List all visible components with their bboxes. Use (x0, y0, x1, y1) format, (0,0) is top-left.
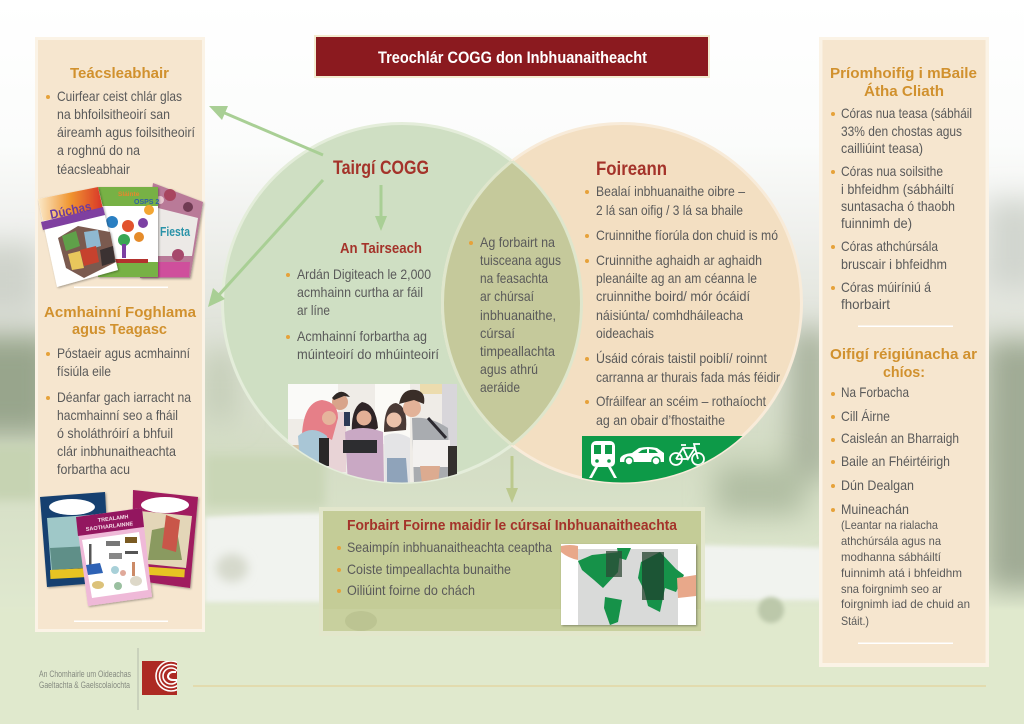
venn diagram (222, 124, 802, 482)
circle: Foireann (442, 124, 802, 482)
bullet: digital platform: ar líne (297, 302, 330, 318)
small girl (384, 403, 406, 432)
arrows: Tairgí COGG to left panel (208, 106, 323, 307)
overlap text: na feasachta (480, 270, 548, 286)
book: Sláinte agus Folláine (98, 187, 159, 277)
bullet: heating: Córas nua teasa (sábháil (841, 105, 972, 121)
arrow: to Acmhainní (208, 180, 323, 307)
bullet: composting: Córas múiríniú á (841, 279, 931, 295)
footer: organisation name (39, 669, 131, 691)
overlap edge (512, 160, 583, 446)
heading: regional offices: Oifigí réigiúnacha ar (830, 346, 977, 363)
bullet: lighting: fuinnimh de) (841, 215, 912, 231)
bullet: teacher resources (286, 328, 439, 362)
bullet: green cover question: na bhfoilsitheoirí san (57, 106, 170, 122)
icon: bicycle (670, 444, 704, 465)
overlap text: agus athrú (480, 361, 538, 377)
bullet: composting: fhorbairt (841, 296, 890, 312)
photo: world map puzzle (561, 544, 696, 625)
list: regional offices: Baile an Fhéirtéirigh (841, 453, 950, 469)
arrow: down to An Tairseach (375, 185, 387, 231)
overlap text: timpeallachta (480, 343, 555, 359)
bullet: public transport (585, 350, 780, 385)
bullet: sustainable suppliers (46, 389, 191, 477)
book: Fiesta (140, 183, 203, 278)
bullet: face to face meetings: Cruinnithe aghaidh ar aghaidh (596, 252, 762, 268)
bullet: posters: Póstaeir agus acmhainní (57, 345, 190, 361)
bullet: public transport: carranna ar thurais fada más féidir (596, 369, 780, 385)
list: regional offices: Caisleán an Bharraigh (841, 430, 959, 446)
note: state buildings: modhanna sábháiltí (841, 550, 942, 564)
bullet: sustainable suppliers: clár inbhunaitheachta (57, 443, 176, 459)
bullet: sustainable suppliers: ó sholáthróirí a bhfuil (57, 425, 173, 441)
overlap text: tuisceana agus (480, 252, 561, 268)
heading: Teácsleabhair: Teácsleabhair (70, 65, 169, 82)
image: textbook covers (38, 183, 203, 287)
logo (142, 661, 186, 695)
list: regional offices: Dún Dealgan (841, 477, 914, 493)
bullet: posters (46, 345, 190, 379)
footer: organisation name: Gaeltachta & Gaelscolaíochta (39, 680, 131, 691)
note: state buildings: sna foirgnimh seo ar (841, 582, 942, 596)
bullet: lighting: Córas nua soilsithe (841, 163, 943, 179)
bullet: green cover question: a roghnú do na (57, 142, 140, 158)
overlap segment (441, 160, 580, 446)
heading: Dublin head office (830, 65, 977, 100)
boy right (403, 399, 421, 417)
bullet: heating: 33% den chostas agus (841, 123, 962, 139)
panel: textbooks and learning resources (35, 37, 205, 632)
bullet: working arrangements: Bealaí inbhuanaithe oibre – (596, 183, 745, 199)
girl pink hair (302, 400, 338, 440)
bullet: cycle to work: Ofráilfear an scéim – rothaíocht (596, 393, 766, 409)
bullet: digital platform (286, 266, 431, 318)
overlap text: cúrsaí (480, 325, 515, 341)
book: Sláinte agus Folláine: OSPS 2 (134, 199, 159, 206)
boy at back (328, 412, 346, 472)
panel: staff development (319, 507, 705, 636)
bullet: heating: cailliúint teasa) (841, 140, 923, 156)
book: Sláinte agus Folláine: Sláinte (118, 191, 140, 198)
bullet: virtual meetings: Cruinnithe fíorúla don chuid is mó (596, 227, 778, 243)
book: Fiesta: Fiesta (160, 224, 191, 239)
note: state buildings: Stáit.) (841, 614, 869, 628)
bullet: cycle to work (585, 393, 766, 428)
list: regional offices: Muineachán (841, 501, 909, 517)
bullet: cycle to work: ag an obair d’fhostaithe (596, 412, 725, 428)
heading: Dublin head office: Príomhoifig i mBaile (830, 65, 977, 82)
image: posters: SAOTHARLAINNE (86, 521, 134, 533)
bullet: lighting: suntasacha ó thaobh (841, 198, 955, 214)
bullet: green cover question: téacsleabhair (57, 161, 130, 177)
overlap text (469, 234, 561, 395)
overlap text: Ag forbairt na (480, 234, 555, 250)
title banner: Treochlár COGG don Inbhuanaitheacht (378, 48, 647, 67)
bullet: public transport: Úsáid córais taistil poiblí/ roinnt (596, 350, 767, 366)
list: regional offices: Na Forbacha (841, 384, 909, 400)
bullet: lighting (831, 163, 955, 231)
bullet: green cover question (46, 88, 195, 177)
footer: organisation name: An Chomhairle um Oideachas (39, 669, 131, 680)
panel: offices (819, 37, 989, 667)
heading: Foireann: Foireann (596, 159, 667, 180)
heading: regional offices: chíos: (883, 364, 925, 381)
image: posters: TREALAMH (98, 514, 129, 524)
circle: Tairgí COGG (222, 124, 582, 482)
girl centre (352, 402, 378, 430)
bullet: teacher resources: múinteoirí do mhúinteoirí (297, 346, 439, 362)
bullet list: Seaimpín inbhuanaitheachta ceaptha (347, 539, 552, 555)
bullet list (337, 539, 552, 598)
note: state buildings: fuinnimh atá i bhfeidhm (841, 566, 962, 580)
bullet: teacher resources: Acmhainní forbartha ag (297, 328, 427, 344)
bullet: recycling (831, 238, 947, 272)
bullet: face to face meetings: pleanáilte ag an am céanna le (596, 270, 757, 286)
note: state buildings: foirgnimh iad de chuid an (841, 597, 970, 611)
overlap text: inbhuanaithe, (480, 307, 556, 323)
title banner (314, 35, 710, 78)
bullet: recycling: bruscair i bhfeidhm (841, 256, 947, 272)
bullet: posters: físiúla eile (57, 363, 111, 379)
green transport strip (582, 436, 742, 482)
bullet: face to face meetings (585, 252, 762, 341)
overlap text: ar chúrsaí (480, 288, 534, 304)
book: Dúchas (38, 187, 118, 287)
bullet: working arrangements: 2 lá san oifig / 3 lá sa bhaile (596, 202, 743, 218)
note: state buildings (841, 518, 970, 628)
icon: car (620, 447, 664, 465)
photo: students with tablet (288, 384, 457, 485)
bullet: green cover question: áireamh agus foilsitheoirí (57, 124, 195, 140)
arrow: down to staff development (506, 456, 518, 503)
left circle content (286, 158, 457, 485)
note: state buildings: athchúrsála agus na (841, 534, 941, 548)
list: regional offices: Cill Áirne (841, 408, 890, 424)
bullet: green cover question: Cuirfear ceist chlár glas (57, 88, 182, 104)
heading: Tairgí COGG: Tairgí COGG (333, 158, 429, 179)
heading: Acmhainní Foghlama agus Teagasc (44, 304, 197, 338)
heading: An Tairseach: An Tairseach (340, 240, 422, 257)
right circle content (582, 159, 780, 486)
heading: staff development: Forbairt Foirne maidir le cúrsaí Inbhuanaitheachta (347, 518, 678, 534)
list: regional offices (831, 384, 959, 517)
bullet: face to face meetings: cruinnithe boird/ mór ócáidí (596, 288, 750, 304)
bullet: working arrangements (585, 183, 745, 218)
book: Dúchas: Dúchas (49, 199, 93, 222)
bullet: lighting: i bhfeidhm (sábháiltí (841, 181, 954, 197)
bullet: sustainable suppliers: Déanfar gach iarracht na (57, 389, 191, 405)
bullet: sustainable suppliers: forbartha acu (57, 461, 130, 477)
bullet: digital platform: Ardán Digiteach le 2,000 (297, 266, 431, 282)
image: posters (40, 490, 198, 606)
river (205, 513, 825, 602)
bullet: face to face meetings: oideachais (596, 325, 654, 341)
heading: Acmhainní Foghlama agus Teagasc: agus Teagasc (72, 321, 167, 338)
arrow: to Teácsleabhair (209, 106, 323, 155)
bullet: face to face meetings: náisiúnta/ comhdháileacha (596, 307, 743, 323)
note: state buildings: (Leantar na rialacha (841, 518, 938, 532)
heading: Acmhainní Foghlama agus Teagasc: Acmhainní Foghlama (44, 304, 197, 321)
bullet: composting (831, 279, 931, 312)
bullet: sustainable suppliers: hacmhainní seo a fháil (57, 407, 178, 423)
icon: train (589, 441, 617, 478)
bullet list: Coiste timpeallachta bunaithe (347, 561, 511, 577)
bullet: digital platform: acmhainn curtha ar fáil (297, 284, 423, 300)
overlap text: aeráide (480, 379, 520, 395)
bullet list: Oiliúint foirne do chách (347, 582, 475, 598)
heading: regional offices (830, 346, 977, 381)
bullet: heating (831, 105, 972, 156)
bullet: recycling: Córas athchúrsála (841, 238, 938, 254)
heading: Dublin head office: Átha Cliath (864, 83, 944, 100)
